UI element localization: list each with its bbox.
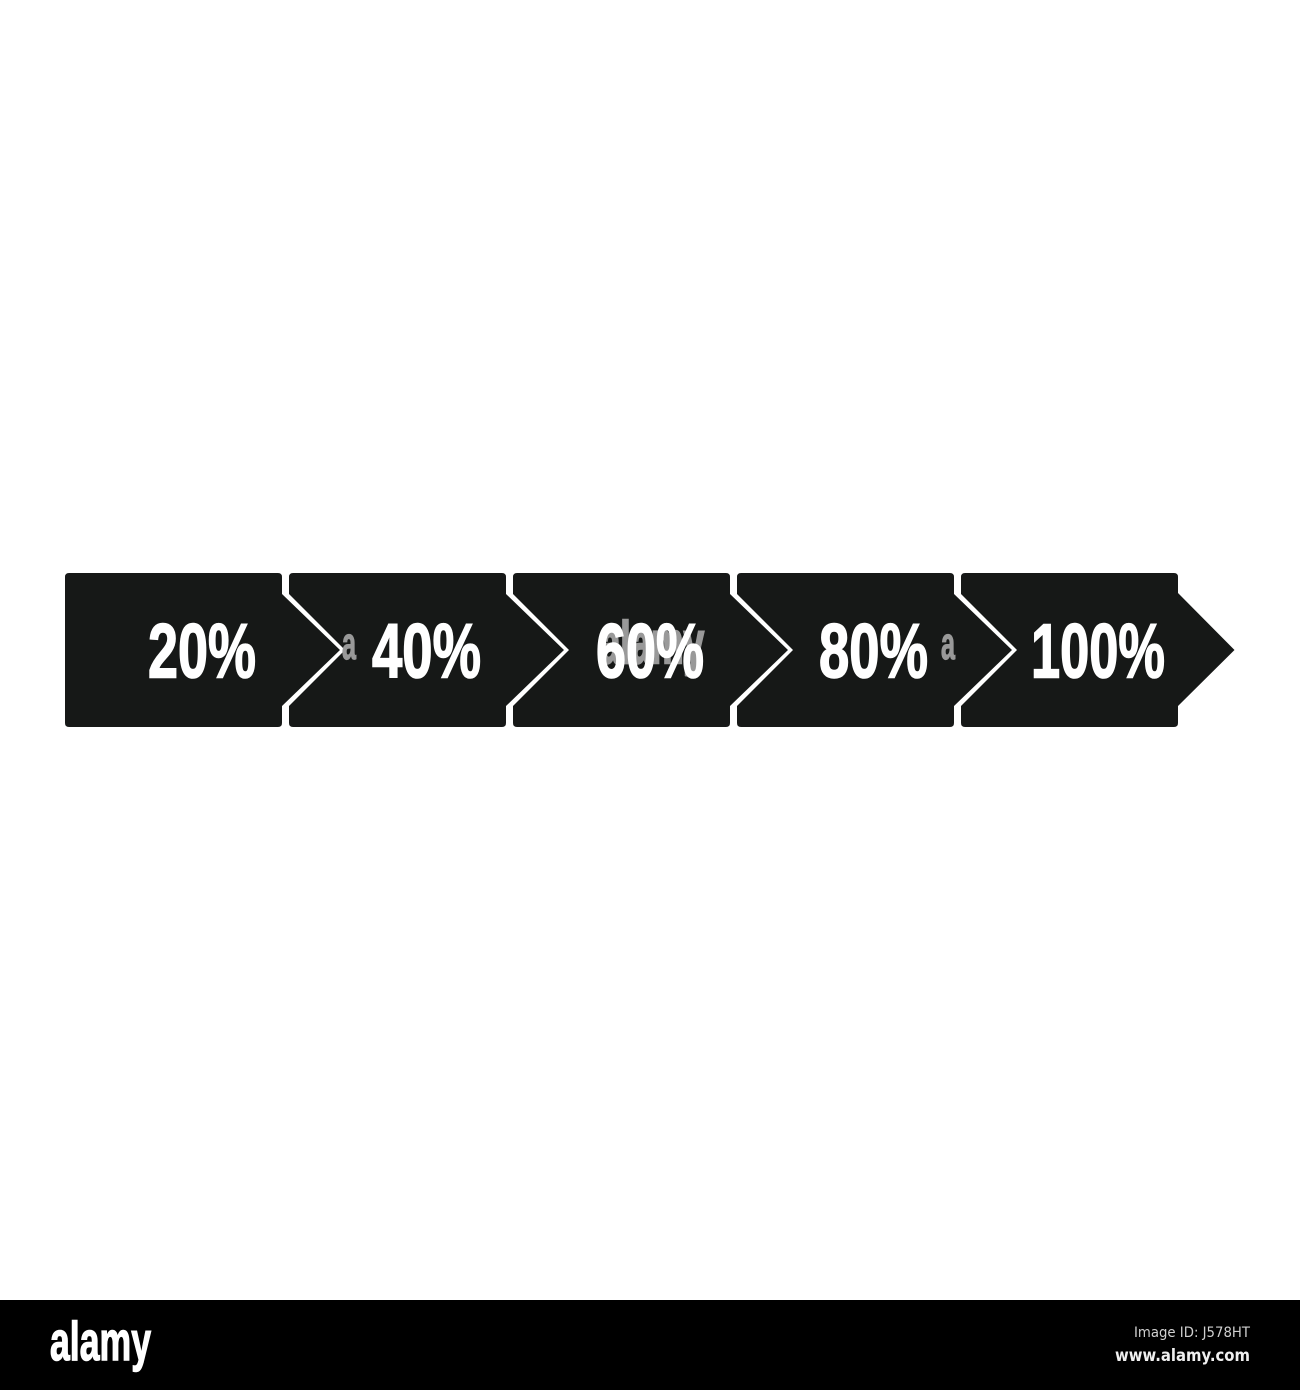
- segment: 60%: alamy: [600, 610, 704, 676]
- segment: 40%: 40%: [372, 608, 481, 694]
- segment: 60%: 60%: [596, 608, 704, 694]
- progress arrow bar: [65, 573, 1234, 727]
- image id: Image ID: J578HT: [1134, 1325, 1250, 1341]
- website url: www.alamy.com: [1115, 1346, 1250, 1365]
- segment: 100%: [961, 573, 1234, 727]
- segment: 100%: 100%: [1031, 608, 1165, 694]
- segment: 20%: 20%: [148, 608, 256, 694]
- segment: 80%: a: [941, 618, 956, 669]
- footer logo: alamy: [50, 1310, 151, 1372]
- segment: 40%: [289, 573, 564, 727]
- segment: 40%: a: [342, 618, 357, 669]
- segment: 80%: 80%: [819, 608, 928, 694]
- footer bar: [0, 1300, 1300, 1390]
- segment: 80%: [737, 573, 1012, 727]
- segment: 60%: [513, 573, 788, 727]
- segment: 20%: [65, 573, 340, 727]
